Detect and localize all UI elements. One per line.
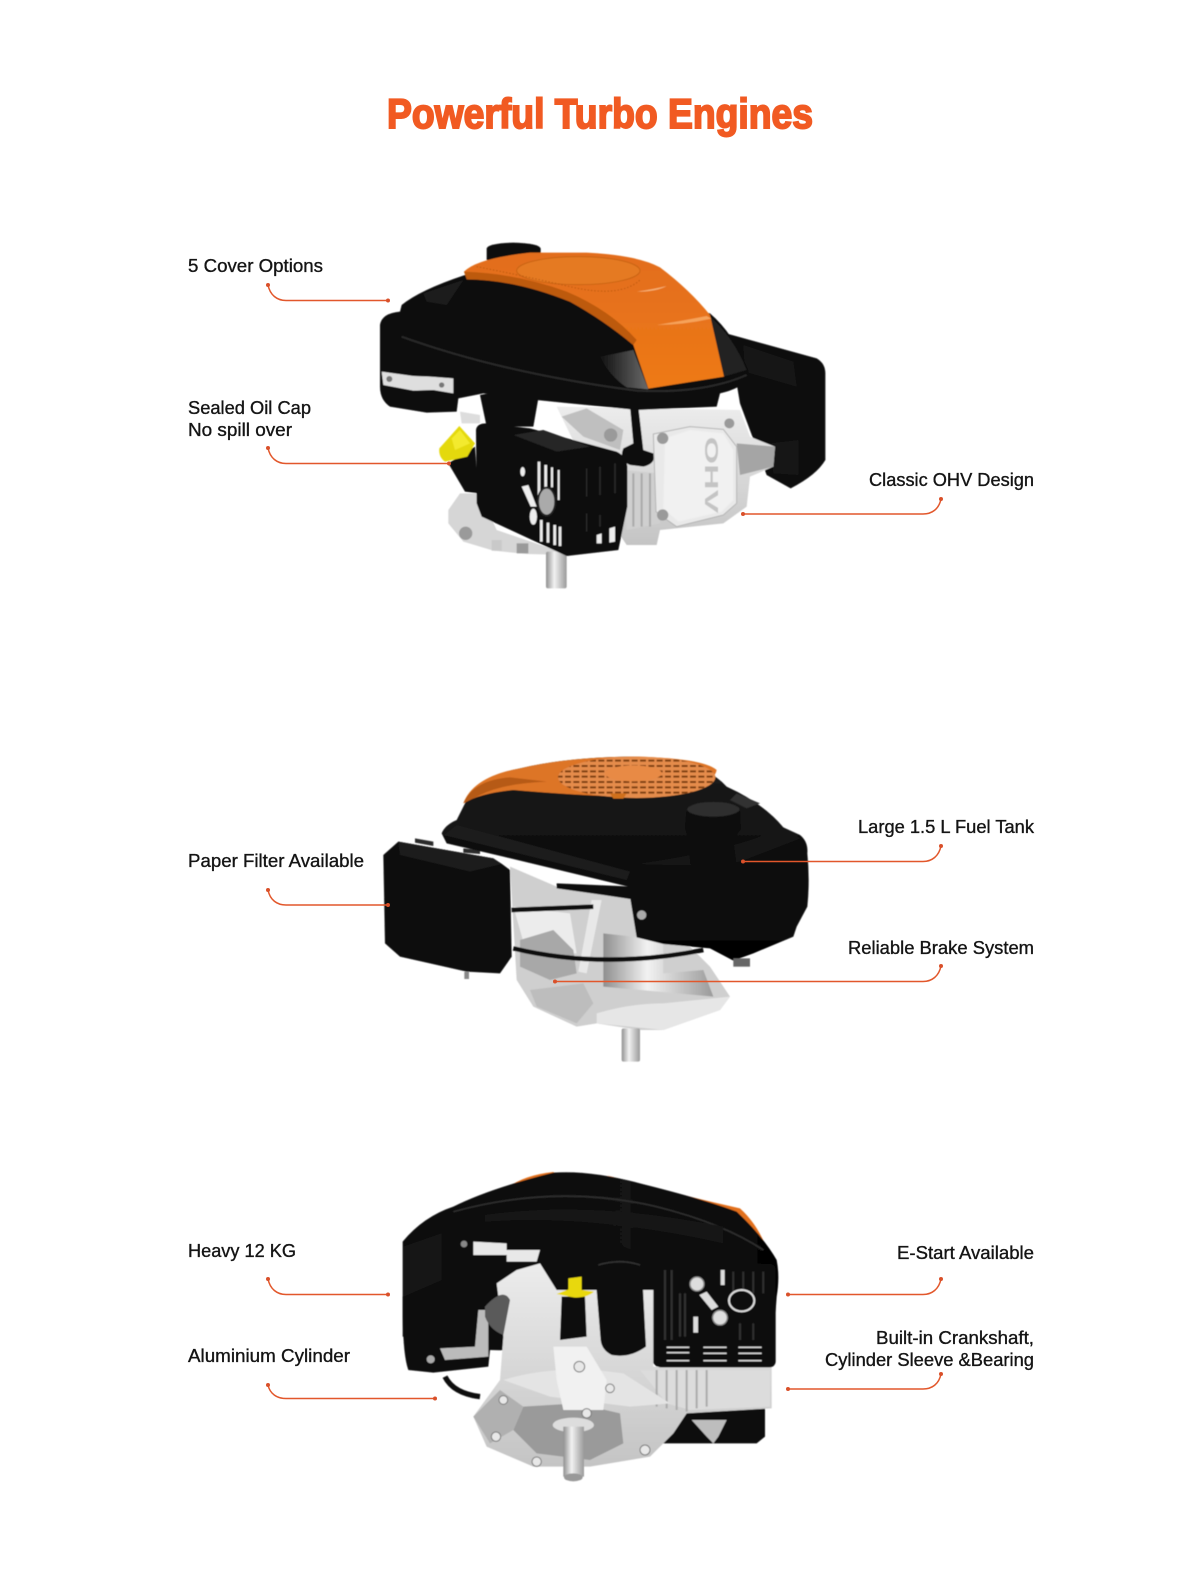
silver engine block <box>557 407 775 545</box>
label: Large 1.5 L Fuel Tank: Large 1.5 L Fuel Tank <box>858 816 1035 837</box>
title: Powerful Turbo Engines <box>387 90 813 137</box>
engine 1: front view with orange cover: OHV <box>701 437 722 514</box>
output shaft <box>622 1028 640 1062</box>
muffler <box>476 423 627 556</box>
silver crankcase <box>473 1263 772 1467</box>
label: Large 1.5 L Fuel Tank <box>741 816 1035 864</box>
lower casting and shaft <box>448 493 570 555</box>
label: Sealed Oil Cap: Sealed Oil Cap <box>188 397 311 418</box>
mounting bolt <box>637 910 646 920</box>
silver engine block <box>510 867 730 1030</box>
throttle bracket <box>473 1242 540 1262</box>
black shroud and fuel tank <box>442 757 809 961</box>
label: E-Start Available <box>786 1242 1034 1296</box>
label: Sealed Oil Cap <box>188 397 451 466</box>
muffler guard <box>655 1264 776 1367</box>
label: 5 Cover Options <box>188 255 390 302</box>
sump cone <box>692 1420 727 1443</box>
label: Heavy 12 KG <box>188 1240 390 1296</box>
orange fan cover <box>463 757 717 803</box>
engine 2: rear view with fuel tank <box>383 757 809 1062</box>
output shaft <box>553 1418 594 1432</box>
label: Classic OHV Design <box>741 469 1034 516</box>
main black shroud <box>380 275 748 413</box>
spark plug boot <box>622 407 654 467</box>
label: E-Start Available: E-Start Available <box>897 1242 1034 1263</box>
label: Built-in Crankshaft, Cylinder Sleeve and Bearing: Cylinder Sleeve &Bearing <box>825 1349 1034 1370</box>
label: Reliable Brake System: Reliable Brake System <box>848 937 1034 958</box>
icon: yellow oil cap <box>439 426 475 462</box>
engine 1: front view with orange cover <box>380 243 825 588</box>
rear bottom cover <box>657 1407 765 1443</box>
label: 5 Cover Options: 5 Cover Options <box>188 255 323 276</box>
fan grille <box>558 757 715 798</box>
icon: yellow oil cap <box>557 1277 594 1297</box>
label: Paper Filter Available <box>188 850 390 907</box>
label: Aluminium Cylinder: Aluminium Cylinder <box>188 1345 350 1366</box>
label: Sealed Oil Cap: No spill over <box>188 419 292 440</box>
hoses <box>512 907 703 960</box>
orange cover edges <box>505 1172 563 1189</box>
OHV valve cover <box>653 427 737 527</box>
fuel cap <box>685 804 741 864</box>
air filter housing <box>383 842 512 973</box>
label: Heavy 12 KG: Heavy 12 KG <box>188 1240 296 1261</box>
orange cover <box>464 253 724 389</box>
label: Aluminium Cylinder <box>188 1345 437 1400</box>
filler cap <box>487 243 541 260</box>
filler neck <box>480 392 538 427</box>
hose <box>445 1377 480 1397</box>
black filter canister <box>594 1240 646 1356</box>
label: Built-in Crankshaft, Cylinder Sleeve and Bearing: Built-in Crankshaft, <box>876 1327 1034 1348</box>
label: Built-in Crankshaft, Cylinder Sleeve and Bearing <box>786 1327 1034 1391</box>
black dipstick tube <box>560 1297 587 1340</box>
label: Classic OHV Design: Classic OHV Design <box>869 469 1034 490</box>
oil tube <box>448 447 478 493</box>
bolts <box>491 1361 650 1466</box>
label: Reliable Brake System <box>553 937 1034 984</box>
base plate casting <box>513 1403 623 1460</box>
label: Paper Filter Available: Paper Filter Available <box>188 850 364 871</box>
air filter housing <box>728 334 825 488</box>
black shroud <box>403 1172 778 1373</box>
engine 3: side view <box>403 1172 778 1481</box>
mounting bracket <box>382 372 453 393</box>
